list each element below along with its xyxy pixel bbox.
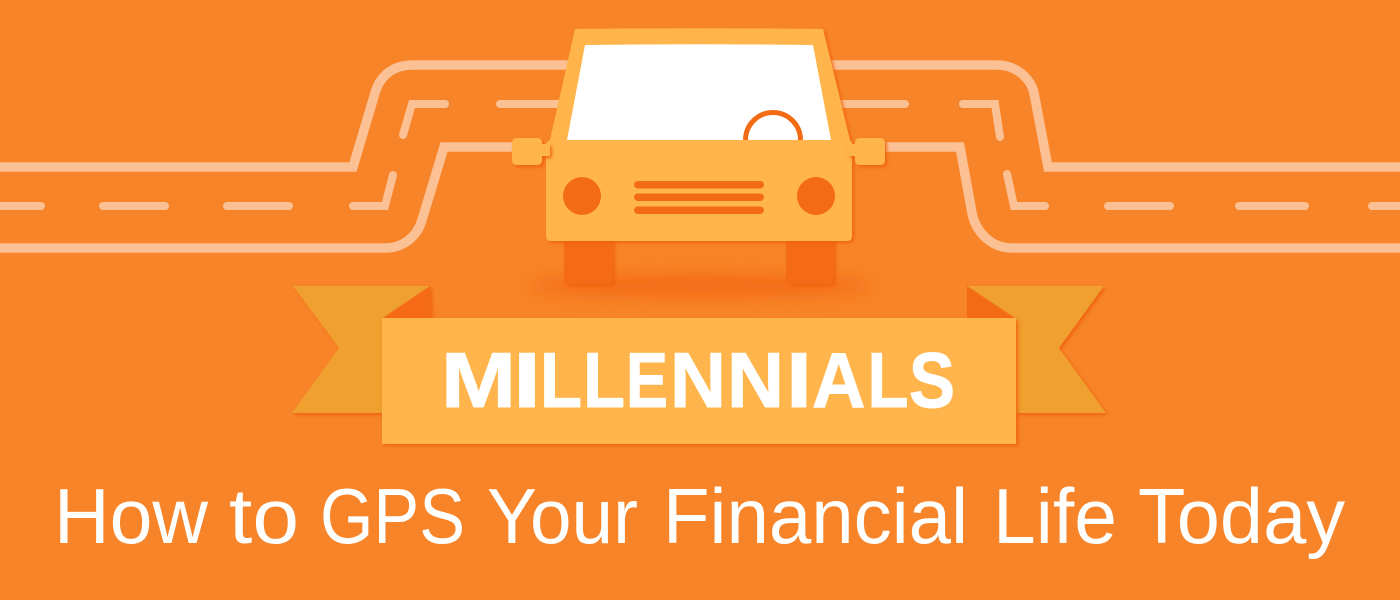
ribbon tail: right xyxy=(967,286,1106,413)
car xyxy=(512,28,885,284)
ribbon fold: right xyxy=(967,286,1015,318)
ribbon banner xyxy=(292,286,1106,444)
subtitle: Financial xyxy=(663,472,968,560)
mirror: left xyxy=(512,138,550,165)
ribbon label: L xyxy=(583,336,625,424)
headlight: left xyxy=(563,177,601,215)
ribbon label: I xyxy=(513,336,541,424)
ribbon label: S xyxy=(909,336,955,424)
windshield xyxy=(567,44,831,140)
steering wheel xyxy=(746,112,800,140)
ribbon label: L xyxy=(868,336,908,424)
ribbon label: N xyxy=(727,336,784,424)
ribbon label: N xyxy=(670,336,726,424)
subtitle: Today xyxy=(1138,472,1345,560)
ribbon tail: left xyxy=(292,286,430,413)
car shadow on ground xyxy=(528,275,872,297)
road: left section xyxy=(0,65,575,248)
ribbon label: L xyxy=(540,336,582,424)
wheel: left xyxy=(564,230,613,284)
subtitle: Your xyxy=(487,472,638,560)
subtitle: How xyxy=(54,472,209,560)
subtitle: Life xyxy=(993,472,1117,560)
car body xyxy=(546,28,852,241)
ribbon label: E xyxy=(626,336,668,424)
wheel: right xyxy=(786,230,834,284)
ribbon label: M xyxy=(441,336,516,424)
headlight: right xyxy=(797,177,835,215)
ribbon label: I xyxy=(786,336,812,424)
ribbon label: A xyxy=(812,336,866,424)
grille xyxy=(634,181,764,214)
road: right section xyxy=(825,65,1400,248)
mirror: right xyxy=(848,138,885,165)
subtitle: GPS xyxy=(320,472,465,560)
ribbon fold: left xyxy=(383,286,431,318)
subtitle: to xyxy=(229,472,299,560)
ribbon main panel xyxy=(382,318,1016,444)
